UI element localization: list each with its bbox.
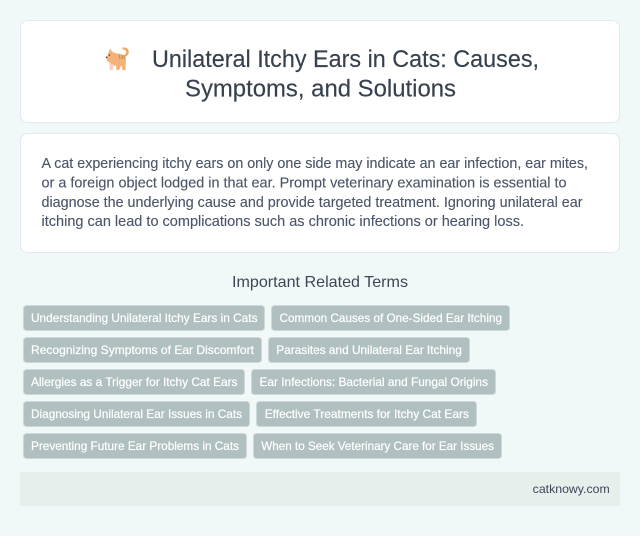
tag 9 [24, 434, 246, 458]
heading: related terms: Important Related Terms [232, 274, 408, 291]
tag 10 [254, 434, 502, 458]
tag 8: Effective Treatments for Itchy Cat Ears [265, 407, 469, 421]
footer [20, 472, 620, 506]
tag 3: Recognizing Symptoms of Ear Discomfort [31, 343, 255, 357]
tag 3 [24, 338, 262, 362]
description text: diagnose the underlying cause and provide targeted treatment. Ignoring unilateral ear [42, 195, 583, 211]
title: Symptoms, and Solutions [185, 76, 456, 102]
tags: related terms [24, 306, 510, 458]
description text: or a foreign object lodged in that ear. Prompt veterinary examination is essential to [42, 176, 566, 192]
tag 1: Understanding Unilateral Itchy Ears in Cats [31, 311, 258, 325]
tag 5 [24, 370, 244, 394]
tag 4 [268, 338, 470, 362]
tag 2 [272, 306, 510, 330]
panel: title card [20, 20, 620, 122]
title [152, 46, 539, 102]
tag 9: Preventing Future Ear Problems in Cats [31, 439, 239, 453]
title: Unilateral Itchy Ears in Cats: Causes, [152, 46, 539, 73]
tag 6: Ear Infections: Bacterial and Fungal Origins [260, 375, 488, 389]
tag 7 [24, 402, 250, 426]
tag 5: Allergies as a Trigger for Itchy Cat Ears [31, 375, 238, 389]
tag 7: Diagnosing Unilateral Ear Issues in Cats [31, 407, 242, 421]
panel: description [20, 134, 620, 252]
tag 4: Parasites and Unilateral Ear Itching [276, 343, 462, 357]
tag 8 [256, 402, 476, 426]
tag 1 [24, 306, 264, 330]
description text: A cat experiencing itchy ears on only one side may indicate an ear infection, ear mites, [42, 156, 588, 172]
footer: site name: catknowy.com [533, 482, 610, 496]
tag 2: Common Causes of One-Sided Ear Itching [280, 311, 502, 325]
icon: cat [106, 47, 129, 70]
description text: itching can lead to complications such as chronic infections or hearing loss. [42, 214, 524, 230]
tag 10: When to Seek Veterinary Care for Ear Issues [261, 439, 494, 453]
description text [42, 156, 588, 230]
tag 6 [252, 370, 496, 394]
